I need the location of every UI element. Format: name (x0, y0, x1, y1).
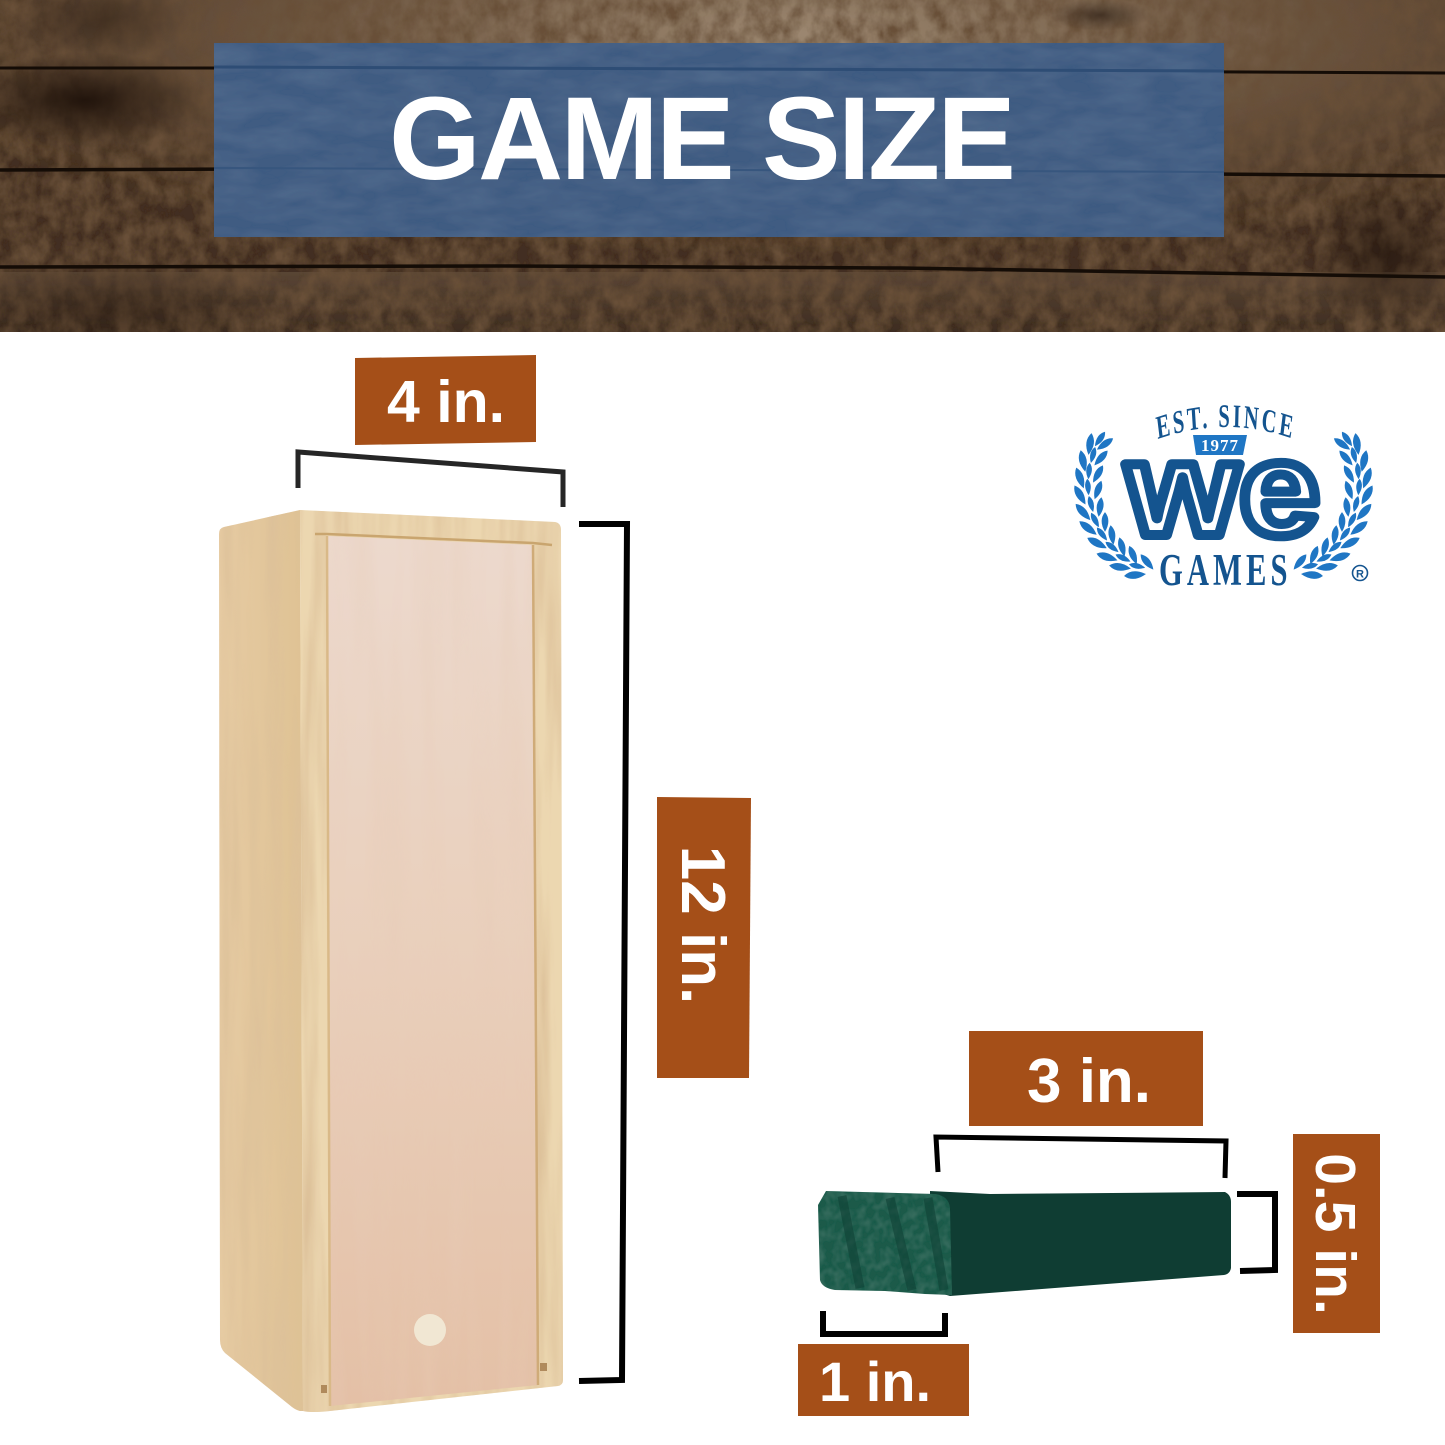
box front frame (300, 510, 563, 1412)
logo: registered mark (1352, 566, 1368, 580)
label: 4 in. (355, 355, 536, 445)
logo: left laurel (1071, 430, 1156, 580)
wooden box (219, 510, 563, 1412)
title banner: blue plank (214, 43, 1224, 237)
stick long side (930, 1191, 1231, 1296)
logo: WE Games (1074, 405, 1373, 596)
logo: registered mark: R (1356, 568, 1364, 580)
label: 4 in.: 4 in. (387, 369, 505, 435)
bracket: box height (579, 524, 627, 1381)
label: 3 in. (969, 1031, 1203, 1126)
bracket: box width (298, 452, 563, 507)
stick end face (818, 1191, 952, 1295)
logo: right laurel (1291, 430, 1376, 580)
label: 12 in. (657, 797, 751, 1078)
logo: 1977 ribbon: 1977 (1201, 436, 1239, 455)
logo: games text: GAMES (1159, 546, 1292, 596)
logo: we wordmark: we (1125, 415, 1320, 564)
bracket: stick width (823, 1311, 945, 1334)
green wooden stick (818, 1191, 1231, 1296)
box sliding lid (327, 536, 538, 1406)
title: GAME SIZE (389, 73, 1016, 205)
header: wood banner background (0, 0, 1445, 360)
label: 1 in.: 1 in. (819, 1350, 931, 1413)
label: 3 in.: 3 in. (1027, 1047, 1151, 1116)
label: 0.5 in.: 0.5 in. (1303, 1153, 1367, 1315)
label: 12 in.: 12 in. (668, 846, 737, 1004)
stick end grooves (842, 1196, 944, 1290)
logo: est. since arc text: EST. SINCE (1155, 405, 1292, 439)
label: 1 in. (798, 1344, 969, 1416)
bracket: stick length (936, 1137, 1226, 1178)
label: 0.5 in. (1293, 1134, 1380, 1333)
box left side (219, 510, 303, 1411)
logo: 1977 ribbon (1193, 435, 1247, 455)
bracket: stick height (1237, 1194, 1275, 1271)
logo: est. since arc text (1155, 405, 1292, 439)
box finger hole (414, 1314, 446, 1346)
